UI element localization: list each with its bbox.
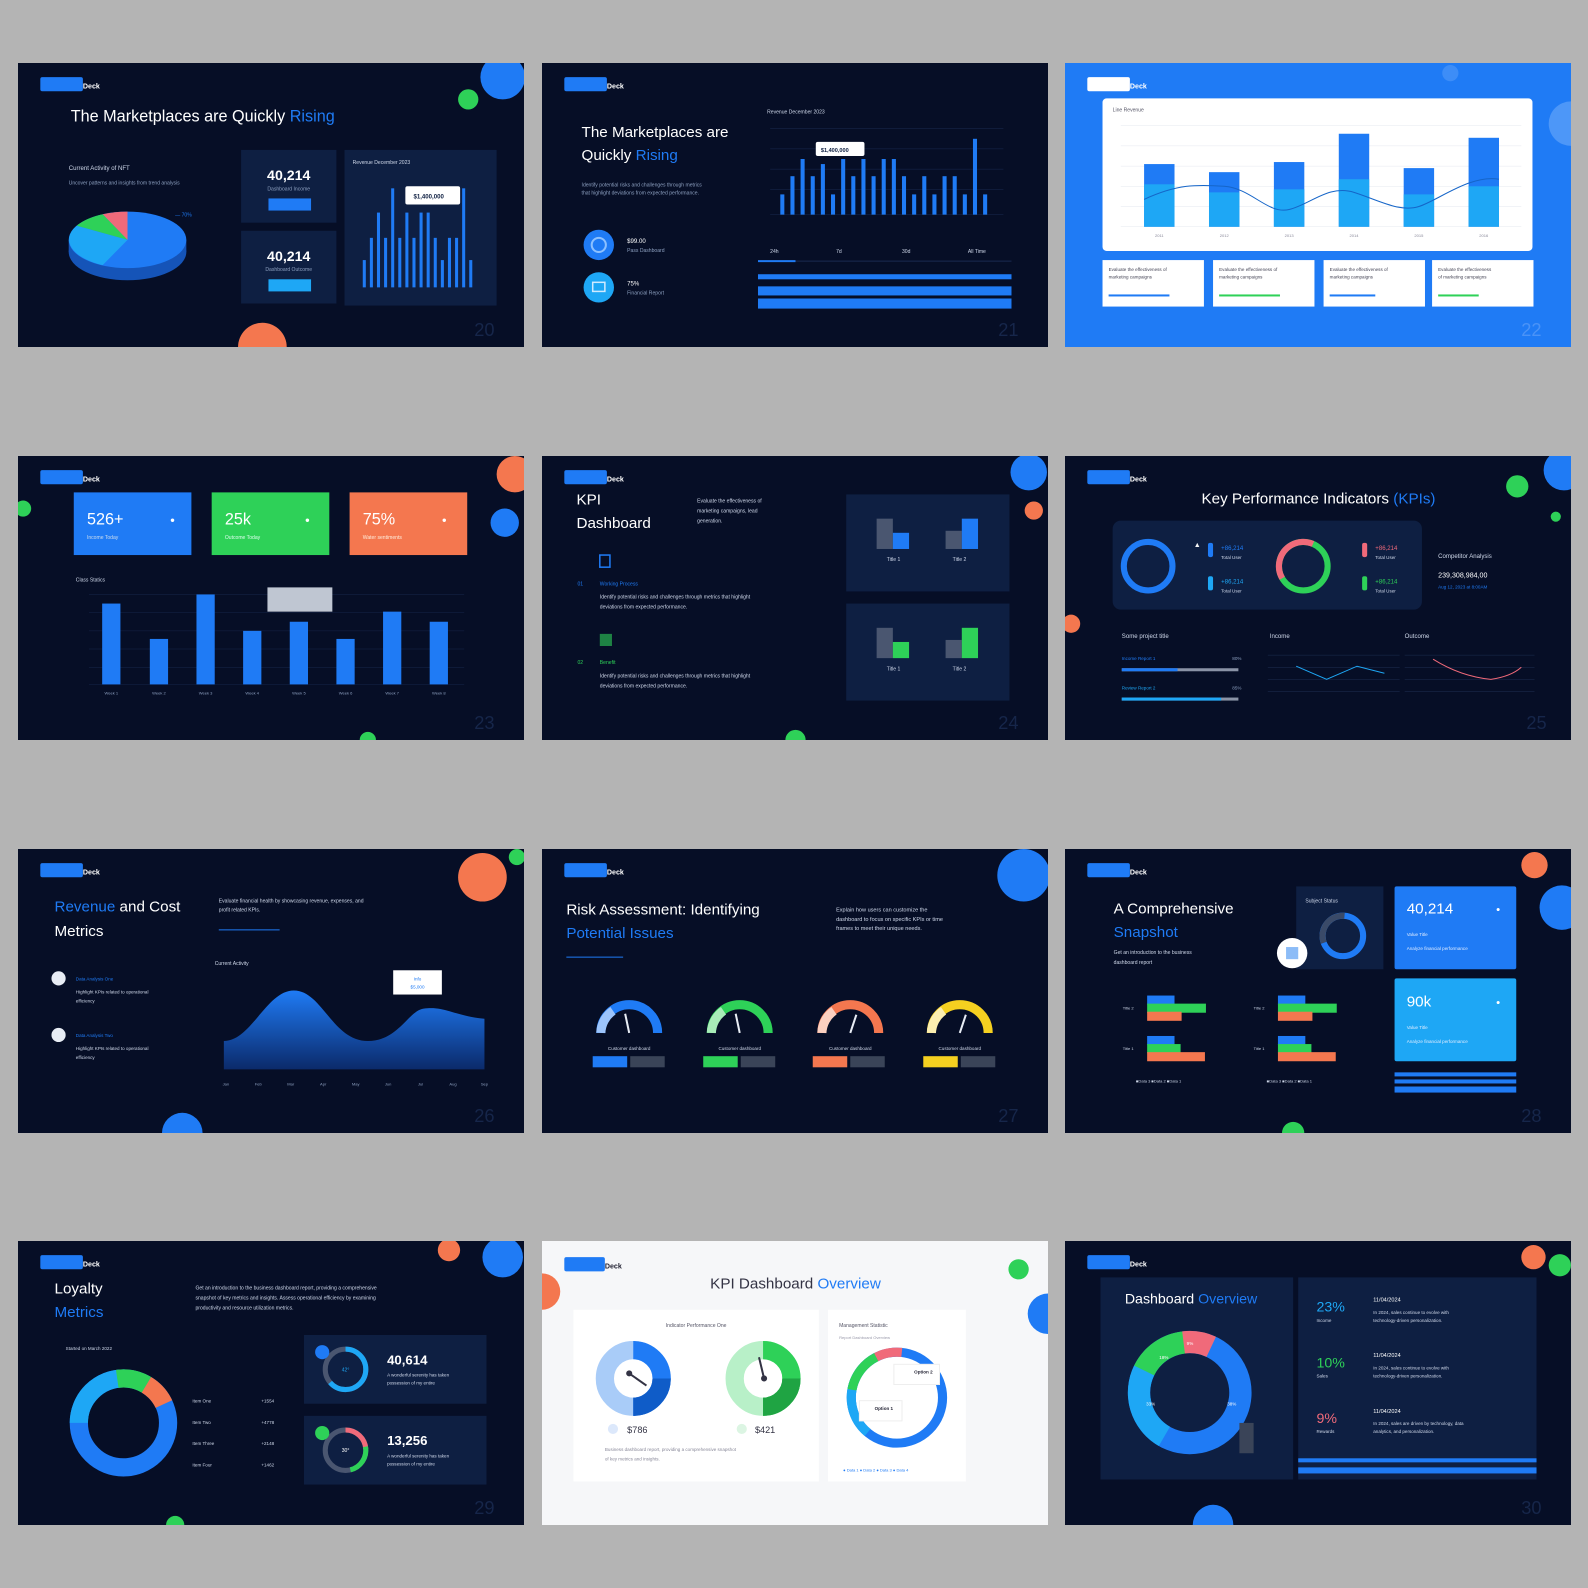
slide 28: comprehensive snapshot [1065, 849, 1571, 1133]
item list: Item Two [192, 1420, 211, 1425]
chart panel 2: Title 2 [953, 666, 966, 672]
title: Dashboard [576, 515, 651, 532]
description: profit related KPIs. [219, 908, 260, 914]
chart panel 2: Title 1 [887, 666, 901, 672]
slide 20: marketplaces rising pie [18, 63, 524, 347]
donut panel: ▲ [1194, 541, 1201, 549]
3d pie chart [69, 212, 192, 280]
title: The Marketplaces are Quickly Rising [71, 108, 335, 126]
area chart: Info [414, 976, 422, 981]
chart card: 2016 [1479, 233, 1489, 238]
stats panel: 9% [1316, 1411, 1337, 1427]
donut panel: Total User [1221, 555, 1242, 560]
logo [40, 77, 100, 91]
logo [564, 77, 624, 91]
stats panel: 11/04/2024 [1373, 1298, 1401, 1304]
tiles: Outcome Today [225, 535, 261, 541]
donut panel: 9% [1187, 1341, 1193, 1346]
tiles: 526+ [87, 511, 123, 529]
management donut card [828, 1310, 966, 1482]
bar chart: Week 7 [385, 691, 400, 696]
bar chart revenue: Revenue December 2023 [353, 160, 410, 166]
stats panel: 10% [1316, 1355, 1345, 1371]
chart card: 2014 [1350, 233, 1359, 238]
subject status donut [1277, 886, 1383, 969]
stats panel: analytics, and personalization. [1373, 1429, 1434, 1434]
description: generation. [697, 519, 722, 525]
competitor analysis: 239,308,984,00 [1438, 571, 1488, 579]
title [55, 899, 181, 940]
info cards [1103, 260, 1533, 307]
list: Data Analysis Two [76, 1033, 113, 1038]
value tile 2 [1395, 978, 1516, 1061]
title: Potential Issues [566, 925, 674, 942]
info cards: Evaluate the effectiveness of [1330, 267, 1389, 272]
management donut card: ● Data 1 ● Data 2 ● Data 3 ● Data 4 [843, 1467, 909, 1472]
title [1114, 901, 1234, 966]
list items: deviations from expected performance. [600, 683, 687, 689]
area chart: Feb [255, 1082, 263, 1086]
logo: Deck [1130, 1260, 1147, 1268]
chart panel 1: Title 2 [953, 557, 966, 563]
description: Evaluate the effectiveness of [697, 498, 762, 504]
donut panel: 33% [1146, 1402, 1155, 1407]
slide 31: dashboard overview: 30 [1521, 1498, 1542, 1518]
donut panel [1100, 1277, 1293, 1480]
description: Evaluate financial health by showcasing revenue, expenses, and [219, 899, 364, 905]
donut panel: Dashboard Overview [1125, 1292, 1258, 1308]
metric card 2: 30° [342, 1448, 349, 1454]
bar chart: Class Statics [76, 577, 105, 583]
title: Metrics [55, 1304, 104, 1321]
donut panel [1113, 521, 1422, 610]
value tile 2: ● [1496, 999, 1500, 1007]
icon stats: $99.00 [627, 239, 646, 245]
income line chart: Income [1270, 634, 1290, 640]
list: Highlight KPIs related to operational [76, 990, 148, 995]
donut panel: +86,214 [1375, 579, 1398, 585]
slide 26: revenue and cost: 26 [474, 1106, 495, 1126]
slide 27: risk assessment gauges: Customer dashboard [939, 1046, 982, 1051]
slide 27: risk assessment gauges [542, 849, 1048, 1133]
bar groups left: ■Data 3 ■Data 2 ■Data 1 [1136, 1078, 1182, 1083]
pie subtitle: Uncover patterns and insights from trend analysis [69, 180, 180, 186]
list items: deviations from expected performance. [600, 605, 687, 611]
management donut card: Report Dashboard Overview [839, 1335, 890, 1340]
description [697, 498, 762, 525]
slide 27: risk assessment gauges: 27 [998, 1106, 1019, 1126]
kpi card 2 [241, 231, 336, 304]
slide 29: loyalty metrics [18, 1241, 524, 1525]
donut panel: Total User [1375, 555, 1396, 560]
title [582, 124, 729, 196]
stats panel: In 2024, sales are driven by technology, data [1373, 1421, 1464, 1426]
list: Data Analysis One [76, 976, 114, 981]
list: Highlight KPIs related to operational [76, 1046, 148, 1051]
area chart [215, 961, 489, 1086]
value tile 2: Value Title [1407, 1025, 1428, 1030]
bar chart: $1,400,000 [821, 148, 849, 154]
logo: Deck [607, 82, 624, 90]
logo: Deck [83, 82, 100, 90]
logo [1087, 1255, 1147, 1269]
tiles: ● [170, 516, 175, 525]
pie subtitle [69, 166, 180, 186]
description [836, 908, 943, 932]
tiles: ● [305, 516, 310, 525]
title [566, 902, 760, 957]
title: KPI Dashboard Overview [710, 1276, 881, 1292]
slide 22: blue combo chart [1065, 63, 1571, 347]
competitor analysis: Competitor Analysis [1438, 554, 1492, 560]
info cards: marketing campaigns [1330, 274, 1374, 279]
chart card [1103, 98, 1532, 251]
competitor analysis [1438, 554, 1492, 589]
slide 27: risk assessment gauges: Customer dashboard [829, 1046, 872, 1051]
value tile 1: Analyze financial performance [1407, 946, 1468, 951]
title: A Comprehensive [1114, 901, 1234, 918]
logo: Deck [607, 475, 624, 483]
indicator card: of key metrics and insights. [605, 1456, 660, 1461]
progress bars [758, 274, 1011, 309]
metric card 2: possession of my entire [387, 1461, 435, 1466]
bar chart: Week 1 [104, 691, 119, 696]
indicator card: Business dashboard report, providing a comprehensive snapshot [605, 1447, 737, 1452]
title: that highlight deviations from expected performance. [582, 190, 699, 196]
slide 25: KPIs: 25 [1526, 713, 1547, 733]
value tile 2: 90k [1407, 994, 1432, 1011]
info cards: marketing campaigns [1109, 274, 1153, 279]
slide 23: tiles and bar chart [18, 456, 524, 740]
bar groups left: Title 1 [1123, 1046, 1134, 1051]
stats panel: technology-driven personalization. [1373, 1318, 1442, 1323]
logo: Deck [1130, 868, 1147, 876]
chart card: 2013 [1285, 233, 1294, 238]
list: efficiency [76, 1055, 95, 1060]
donut panel: 38% [1227, 1402, 1236, 1407]
logo [564, 863, 624, 877]
donut chart [62, 1346, 185, 1484]
title: Snapshot [1114, 924, 1179, 941]
description: marketing campaigns, lead [697, 509, 758, 515]
item list: Item Four [192, 1462, 212, 1467]
time tabs: 24h [770, 249, 779, 255]
description: Explain how users can customize the [836, 908, 927, 914]
icon stats: 75% [627, 281, 640, 287]
value tile 2: Analyze financial performance [1407, 1039, 1468, 1044]
title: Loyalty [55, 1281, 103, 1298]
title: Risk Assessment: Identifying [566, 902, 760, 919]
slide 26: revenue and cost [18, 849, 524, 1133]
slide 30: KPI dashboard overview white [542, 1241, 1048, 1525]
chart card: 2012 [1220, 233, 1229, 238]
item list: +1462 [261, 1462, 275, 1467]
logo: Deck [1130, 82, 1147, 90]
bar groups left [1123, 996, 1206, 1083]
logo: Deck [83, 1260, 100, 1268]
list items: Identify potential risks and challenges through metrics that highlight [600, 595, 751, 601]
tiles [74, 492, 467, 555]
donut chart: Started on March 2022 [66, 1346, 112, 1351]
logo [1087, 77, 1147, 91]
stats panel [1298, 1277, 1537, 1480]
icon stats: Financial Report [627, 290, 665, 296]
logo [1087, 863, 1147, 877]
chart panel 2 [846, 604, 1009, 701]
stats panel: 11/04/2024 [1373, 1409, 1401, 1415]
bar chart revenue [345, 150, 497, 306]
time tabs: All Time [968, 249, 986, 255]
title: dashboard report [1114, 960, 1153, 966]
description: frames to meet their unique needs. [836, 926, 922, 932]
title [55, 1281, 104, 1321]
area chart: Aug [449, 1082, 457, 1086]
logo [40, 863, 100, 877]
description: productivity and resource utilization metrics. [195, 1306, 294, 1312]
metric card 1: possession of my entire [387, 1381, 435, 1386]
bar groups right: Title 1 [1254, 1046, 1265, 1051]
time tabs [758, 249, 1011, 261]
bar chart: Week 6 [339, 691, 353, 696]
indicator card: $786 [627, 1425, 647, 1435]
list items: 02 [577, 660, 583, 666]
progress bars: Some project title [1122, 634, 1169, 640]
bar groups right: ■Data 3 ■Data 2 ■Data 1 [1267, 1078, 1313, 1083]
value tile 1: ● [1496, 906, 1500, 914]
value tile 1 [1395, 886, 1516, 969]
stripes [1395, 1072, 1516, 1093]
logo [564, 470, 624, 484]
donut panel: +86,214 [1221, 579, 1244, 585]
indicator card: Indicator Performance One [666, 1323, 727, 1329]
slide 24: KPI dashboard: 24 [998, 713, 1019, 733]
stats panel: In 2024, sales continue to evolve with [1373, 1365, 1449, 1370]
slide 23: tiles and bar chart: 23 [474, 713, 495, 733]
kpi card 2: 40,214 [267, 249, 311, 265]
icon stats: Pass Dashboard [627, 248, 665, 254]
slide 21: marketplaces bar chart [542, 63, 1048, 347]
competitor analysis: Aug 12, 2023 at 8:00AM [1438, 584, 1487, 589]
logo [40, 1255, 100, 1269]
bar chart: Week 8 [432, 691, 446, 696]
indicator card [573, 1310, 819, 1482]
gauges [601, 1005, 988, 1033]
list items: Identify potential risks and challenges through metrics that highlight [600, 673, 751, 679]
list items [577, 555, 751, 689]
donut panel: +86,214 [1221, 546, 1244, 552]
logo [564, 1257, 622, 1271]
metric card 2: 13,256 [387, 1433, 427, 1448]
tiles: 25k [225, 511, 252, 529]
donut panel: Total User [1221, 588, 1242, 593]
bar groups right: Title 2 [1254, 1006, 1265, 1011]
title: The Marketplaces are [582, 124, 729, 141]
stats panel: In 2024, sales continue to evolve with [1373, 1310, 1449, 1315]
description [195, 1286, 377, 1312]
stats panel: technology-driven personalization. [1373, 1373, 1442, 1378]
bar chart: Week 4 [245, 691, 260, 696]
tiles: Water sentiments [363, 535, 402, 541]
area chart: Mar [287, 1082, 295, 1086]
kpi card 1 [241, 150, 336, 223]
item list: +2148 [261, 1441, 275, 1446]
slide 24: KPI dashboard [542, 456, 1048, 740]
bar chart [76, 577, 464, 696]
info cards: Evaluate the effectiveness [1438, 267, 1492, 272]
logo: Deck [1130, 475, 1147, 483]
management donut card: Management Statistic [839, 1323, 888, 1329]
tiles: 75% [363, 511, 395, 529]
title: Key Performance Indicators (KPIs) [1202, 491, 1435, 507]
list [51, 971, 148, 1060]
item list: Item One [192, 1399, 212, 1404]
area chart: Apr [320, 1082, 327, 1086]
bar chart: Week 5 [292, 691, 306, 696]
pie subtitle: Current Activity of NFT [69, 166, 130, 172]
bar chart: Week 2 [152, 691, 167, 696]
income line chart [1268, 634, 1400, 691]
bar chart revenue: $1,400,000 [413, 194, 444, 200]
outcome line chart [1405, 634, 1534, 691]
title: Identify potential risks and challenges through metrics [582, 182, 702, 188]
subject status donut: Subject Status [1305, 899, 1338, 905]
slide 31: dashboard overview [1065, 1241, 1571, 1525]
time tabs: 30d [902, 249, 911, 255]
item list: +4778 [261, 1420, 275, 1425]
area chart: Jun [385, 1082, 391, 1086]
metric card 1: A wonderful serenity has taken [387, 1372, 450, 1377]
value tile 1: Value Title [1407, 932, 1428, 937]
area chart: Jan [223, 1082, 229, 1086]
list items: 01 [577, 581, 583, 587]
donut panel: Total User [1375, 588, 1396, 593]
tiles: Income Today [87, 535, 119, 541]
chart panel 1: Title 1 [887, 557, 901, 563]
area chart: $5,000 [411, 984, 425, 989]
info cards: of marketing campaigns [1438, 274, 1487, 279]
chart card: 2015 [1414, 233, 1424, 238]
logo: Deck [83, 868, 100, 876]
time tabs: 7d [836, 249, 842, 255]
item list [192, 1399, 275, 1467]
slide 22: blue combo chart: 22 [1521, 320, 1542, 340]
progress bars: 80% [1232, 656, 1241, 661]
chart card: Line Revenue [1113, 108, 1144, 114]
kpi card 1: Dashboard Income [267, 186, 310, 192]
bar chart [767, 110, 1003, 215]
area chart: Jul [418, 1082, 423, 1086]
bar groups left: Title 2 [1123, 1006, 1134, 1011]
icon stats [584, 230, 665, 303]
logo [1087, 470, 1147, 484]
bar chart: Week 3 [199, 691, 213, 696]
metric card 2: A wonderful serenity has taken [387, 1453, 450, 1458]
chart panel 1 [846, 494, 1009, 591]
progress bars: Income Report 1 [1122, 656, 1156, 661]
bar chart: Revenue December 2023 [767, 110, 825, 116]
progress bars [1122, 634, 1241, 701]
kpi card 2: Dashboard Outcome [265, 267, 312, 273]
donut panel: +86,214 [1375, 546, 1398, 552]
progress bars: 85% [1232, 685, 1241, 690]
metric card 1: 42° [342, 1367, 349, 1373]
list: efficiency [76, 999, 95, 1004]
metric card 1: 40,614 [387, 1352, 428, 1367]
info cards: marketing campaigns [1219, 274, 1263, 279]
title [576, 492, 651, 532]
title: Quickly Rising [582, 147, 678, 164]
slide 27: risk assessment gauges: Customer dashboard [608, 1046, 651, 1051]
description: dashboard to focus on specific KPIs or time [836, 917, 943, 923]
title: Revenue and Cost [55, 899, 181, 916]
stats panel: Income [1316, 1318, 1332, 1323]
metric card 2 [304, 1416, 486, 1485]
value tile 1: 40,214 [1407, 901, 1453, 918]
area chart: Sep [481, 1082, 489, 1086]
title: Metrics [55, 923, 104, 940]
list items: Working Process [600, 581, 638, 587]
progress bars: Review Report 2 [1122, 685, 1156, 690]
metric card 1 [304, 1335, 486, 1404]
page number: 20 [474, 320, 495, 340]
info cards: Evaluate the effectiveness of [1109, 267, 1167, 272]
logo: Deck [605, 1262, 622, 1270]
donut panel: 18% [1159, 1355, 1168, 1360]
item list: +1554 [261, 1399, 275, 1404]
list items: Benefit [600, 660, 616, 666]
stats panel: 11/04/2024 [1373, 1353, 1401, 1359]
tiles: ● [442, 516, 447, 525]
title: Get an introduction to the business [1114, 950, 1192, 956]
stats panel: Rewards [1316, 1429, 1335, 1434]
3d pie chart: — 70% [175, 213, 192, 219]
stats panel: Sales [1316, 1373, 1329, 1378]
management donut card: Option 1 [875, 1406, 894, 1411]
slide 25: KPIs [1065, 456, 1571, 740]
description: Get an introduction to the business dashboard report, providing a comprehensive [195, 1286, 377, 1292]
title: KPI [576, 492, 601, 509]
slide 28: comprehensive snapshot: 28 [1521, 1106, 1542, 1126]
logo [40, 470, 100, 484]
info cards: Evaluate the effectiveness of [1219, 267, 1278, 272]
logo: Deck [83, 475, 100, 483]
stats panel: 23% [1316, 1300, 1345, 1316]
area chart: May [352, 1082, 359, 1086]
kpi card 1: 40,214 [267, 168, 311, 184]
outcome line chart: Outcome [1405, 634, 1430, 640]
description: snapshot of key metrics and insights. Assess operational efficiency by examining [195, 1296, 376, 1302]
description [219, 899, 364, 930]
slide 27: risk assessment gauges: Customer dashboard [718, 1046, 761, 1051]
item list: Item Three [192, 1441, 215, 1446]
management donut card: Option 2 [914, 1369, 933, 1374]
logo: Deck [607, 868, 624, 876]
area chart: Current Activity [215, 961, 249, 967]
slide 29: loyalty metrics: 29 [474, 1498, 495, 1518]
indicator card: $421 [755, 1425, 775, 1435]
slide 21: marketplaces bar chart: 21 [998, 320, 1019, 340]
bar groups right [1254, 996, 1337, 1083]
chart card: 2011 [1155, 233, 1164, 238]
